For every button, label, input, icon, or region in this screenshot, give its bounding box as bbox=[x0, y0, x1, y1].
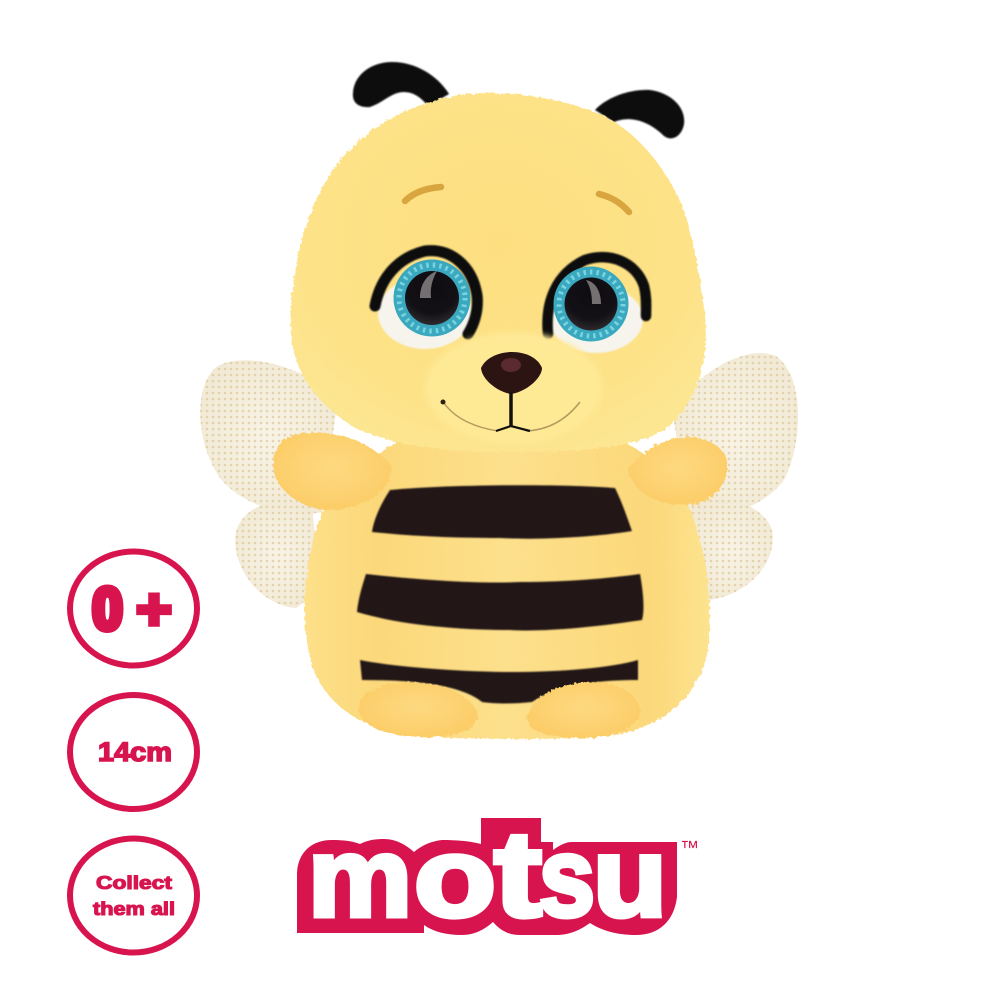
logo: motsu bbox=[297, 806, 699, 942]
logo: motsu: t bbox=[494, 806, 542, 942]
logo: motsu: m bbox=[308, 815, 412, 940]
badge: collect them all bbox=[70, 838, 197, 952]
body bbox=[304, 440, 710, 739]
right eye bbox=[548, 257, 646, 353]
logo: motsu: o bbox=[414, 815, 496, 940]
badge: age 0+: 0 bbox=[92, 577, 122, 642]
icon: bee wings bbox=[200, 353, 798, 608]
belly stripes bbox=[357, 485, 643, 704]
logo: motsu: s bbox=[539, 815, 595, 940]
muzzle bbox=[425, 332, 603, 444]
head bbox=[290, 93, 706, 452]
logo: motsu: u bbox=[593, 815, 667, 940]
icon: antennae bbox=[353, 62, 684, 138]
badge: collect them all: Collect bbox=[96, 873, 172, 893]
badge: age 0+ bbox=[70, 552, 197, 666]
arms bbox=[273, 432, 727, 510]
feet bbox=[359, 682, 640, 738]
badge: collect them all: them all bbox=[93, 899, 175, 919]
badge: size 14cm bbox=[70, 695, 197, 809]
badge: size 14cm: 14cm bbox=[98, 737, 172, 767]
nose and mouth bbox=[440, 352, 580, 431]
badge: age 0+: + bbox=[136, 577, 172, 642]
eyebrows bbox=[405, 187, 629, 212]
left eye bbox=[375, 251, 477, 349]
logo: motsu: ™ bbox=[680, 838, 699, 859]
plush bee toy bbox=[200, 62, 798, 739]
